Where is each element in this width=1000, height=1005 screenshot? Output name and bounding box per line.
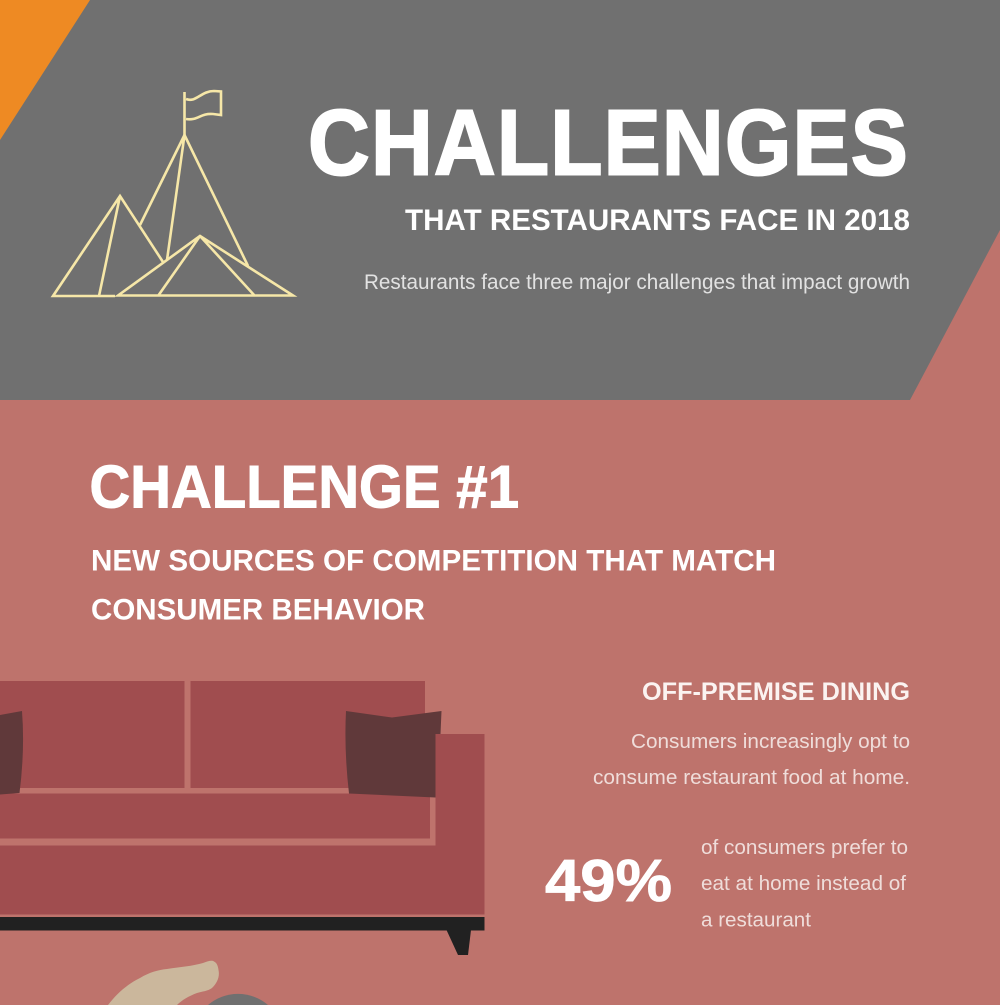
challenge subheading [91,544,776,626]
challenge subheading: CONSUMER BEHAVIOR [91,594,425,626]
header panel [0,0,1000,400]
off-premise description [593,730,910,789]
statistic: 49%: 49% [545,848,672,914]
challenge subheading: NEW SOURCES OF COMPETITION THAT MATCH [91,544,776,578]
illustration: sofa [0,681,484,955]
statistic description: of consumers prefer to [701,836,908,859]
illustration: cropped figure at bottom [108,961,268,1005]
section heading: off-premise dining: OFF-PREMISE DINING [642,678,910,706]
statistic description [701,836,908,932]
off-premise description: Consumers increasingly opt to [631,730,910,753]
icon: mountains with flag [53,91,293,296]
title: CHALLENGES [308,90,908,194]
header description: Restaurants face three major challenges that impact growth [364,270,910,294]
orange corner accent [0,0,90,140]
challenge heading: CHALLENGE #1 [90,454,519,521]
subtitle: THAT RESTAURANTS FACE IN 2018 [405,204,910,237]
statistic description: eat at home instead of [701,872,906,895]
statistic description: a restaurant [701,908,811,932]
off-premise description: consume restaurant food at home. [593,766,910,789]
